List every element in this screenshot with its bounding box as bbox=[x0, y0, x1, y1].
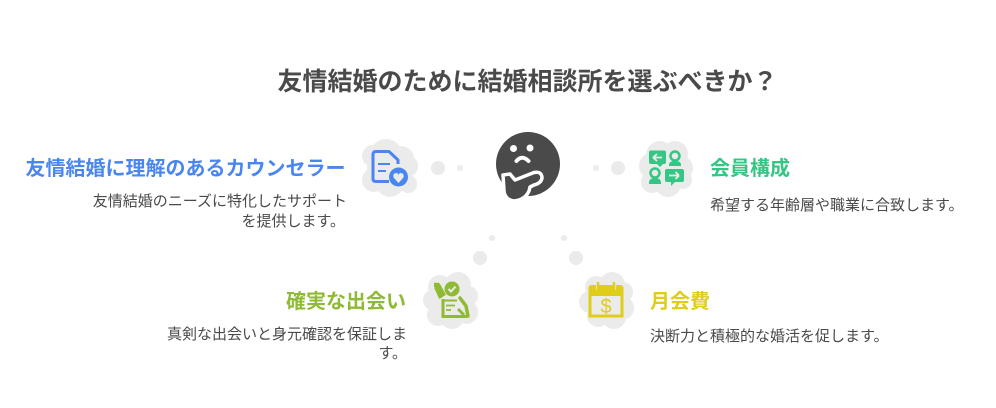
connector dots: bottom left bbox=[473, 235, 495, 265]
description: genuine encounters: 真剣な出会いと身元確認を保証しま bbox=[167, 325, 407, 343]
description: counselor: を提供します。 bbox=[241, 213, 345, 230]
description: counselor bbox=[93, 193, 347, 230]
description: genuine encounters: す。 bbox=[378, 345, 407, 362]
heading: monthly fee: 月会費 bbox=[650, 290, 710, 313]
heading: counselor: 友情結婚に理解のあるカウンセラー bbox=[26, 157, 346, 180]
icon: hands with check bbox=[423, 272, 478, 329]
icon: thinking face bbox=[496, 132, 560, 201]
icon: member chat bbox=[639, 141, 693, 197]
description: genuine encounters bbox=[167, 325, 407, 362]
icon: calendar with dollar: $ bbox=[600, 296, 612, 318]
icon: calendar with dollar bbox=[579, 272, 634, 329]
heading: membership: 会員構成 bbox=[710, 156, 790, 180]
icon: document with heart bbox=[362, 139, 418, 197]
title: 友情結婚のために結婚相談所を選ぶべきか？ bbox=[277, 68, 778, 96]
heading: genuine encounters: 確実な出会い bbox=[286, 290, 406, 313]
connector dots: right bbox=[593, 161, 625, 175]
description: monthly fee: 決断力と積極的な婚活を促します。 bbox=[650, 328, 889, 345]
description: counselor: 友情結婚のニーズに特化したサポート bbox=[93, 193, 347, 210]
description: membership: 希望する年齢層や職業に合致します。 bbox=[710, 197, 964, 214]
connector dots: left bbox=[431, 161, 463, 175]
connector dots: bottom right bbox=[561, 235, 583, 265]
